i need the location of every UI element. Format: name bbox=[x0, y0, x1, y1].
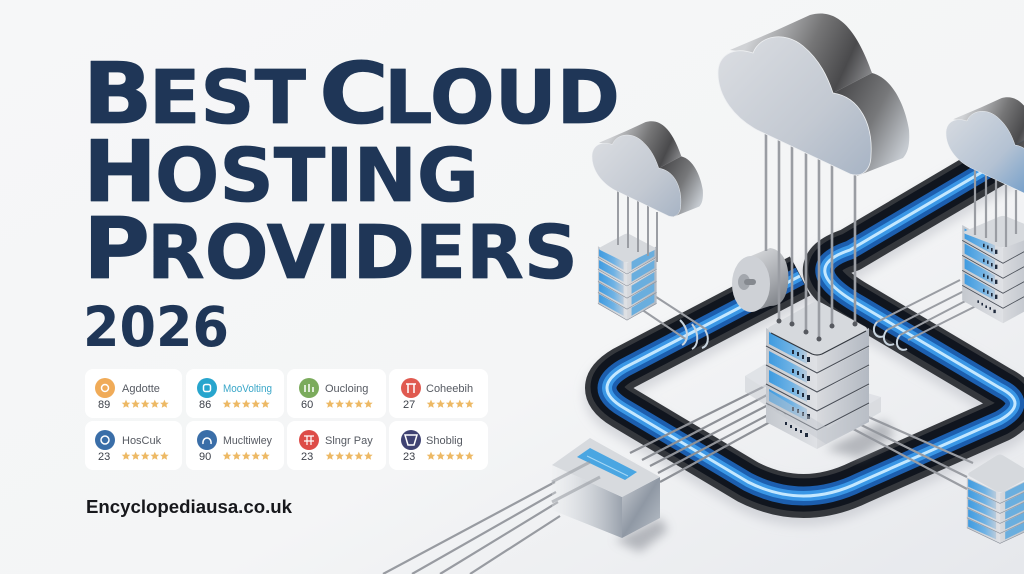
left server stack bbox=[598, 234, 657, 320]
card: Slngr Pay: 23 bbox=[301, 451, 313, 463]
card: Agdotte: 89 bbox=[98, 399, 110, 411]
card: MooVolting bbox=[186, 369, 284, 418]
card: Slngr Pay bbox=[287, 421, 386, 470]
rods: main cloud feet bbox=[776, 318, 858, 342]
card: Agdotte bbox=[85, 369, 182, 418]
wires: lower left cables bbox=[383, 482, 560, 574]
card: Shoblig: 23 bbox=[403, 451, 415, 463]
card: Mucltiwley: 90 bbox=[199, 451, 211, 463]
wires: upper right server bbox=[874, 280, 982, 350]
title: LOUD bbox=[384, 55, 620, 141]
card: Coheebih bbox=[389, 369, 488, 418]
provider cards bbox=[85, 369, 488, 470]
cloud: right bbox=[946, 97, 1024, 195]
card: Agdotte: Agdotte bbox=[122, 383, 160, 395]
card: Oucloing: 60 bbox=[301, 399, 313, 411]
rods: left cloud bbox=[618, 190, 657, 262]
card: Mucltiwley bbox=[186, 421, 284, 470]
cloud: main bbox=[718, 13, 909, 176]
wires: main server to lower right server bbox=[840, 412, 973, 489]
card: MooVolting: 86 bbox=[199, 399, 211, 411]
ground shadow under track bbox=[607, 133, 1024, 503]
card: Slngr Pay: Slngr Pay bbox=[325, 435, 373, 447]
card: Shoblig: Shoblig bbox=[426, 435, 463, 447]
upper right server stack bbox=[962, 216, 1024, 323]
connector cylinder bbox=[732, 248, 788, 312]
card: Mucltiwley: Mucltiwley bbox=[223, 435, 272, 447]
card: MooVolting: MooVolting bbox=[223, 383, 272, 395]
title: P bbox=[83, 200, 150, 299]
track loop bbox=[607, 125, 1024, 496]
wires: main server to left box bbox=[630, 385, 792, 482]
title: OSTING bbox=[155, 133, 479, 219]
card: HosCuk bbox=[85, 421, 182, 470]
card: Oucloing bbox=[287, 369, 386, 418]
rods: right cloud bbox=[975, 170, 1016, 247]
card: Oucloing: Oucloing bbox=[325, 383, 368, 395]
cloud: left bbox=[592, 121, 703, 217]
title bbox=[83, 45, 620, 299]
card: HosCuk: 23 bbox=[98, 451, 110, 463]
rods: main cloud bbox=[766, 130, 855, 338]
card: Coheebih: 27 bbox=[403, 399, 415, 411]
title: ROVIDERS bbox=[147, 210, 578, 296]
title: B bbox=[83, 45, 153, 144]
lower right server stack bbox=[967, 454, 1024, 543]
left switch box bbox=[552, 438, 668, 552]
title: C bbox=[319, 45, 389, 144]
title: EST bbox=[149, 55, 307, 141]
card: Coheebih: Coheebih bbox=[426, 383, 473, 395]
main server stack bbox=[745, 302, 895, 458]
wires: left server bbox=[638, 293, 708, 349]
footer website: Encyclopediausa.co.uk bbox=[86, 497, 293, 517]
network illustration bbox=[383, 13, 1024, 574]
card: HosCuk: HosCuk bbox=[122, 435, 162, 447]
card: Shoblig bbox=[389, 421, 488, 470]
title: H bbox=[83, 123, 157, 222]
year: 2026 bbox=[83, 295, 229, 359]
